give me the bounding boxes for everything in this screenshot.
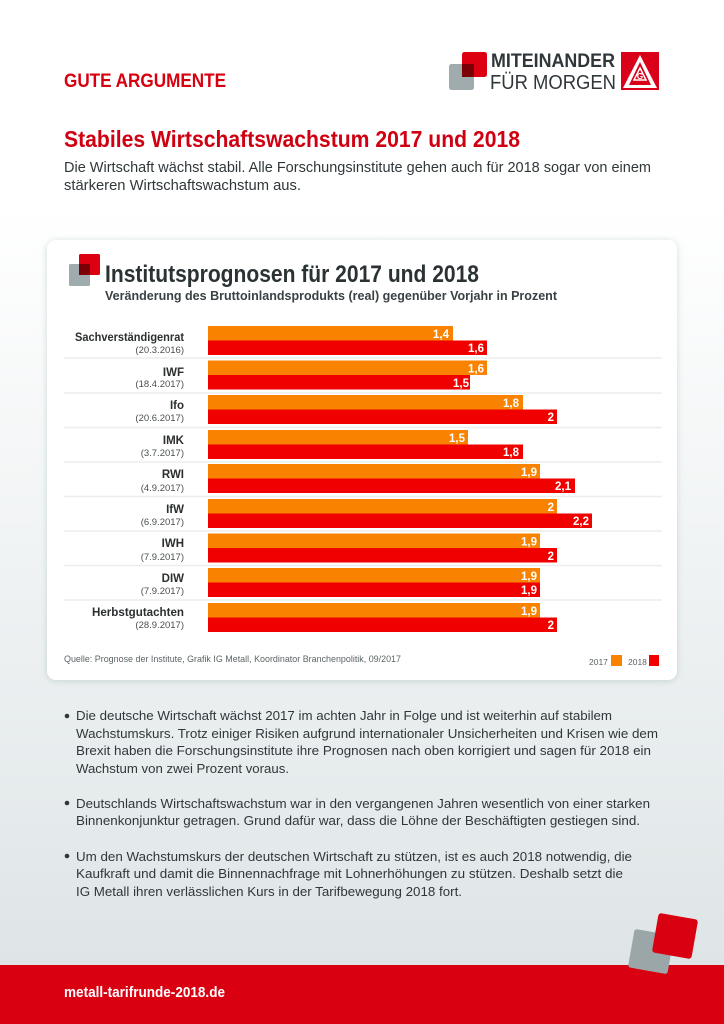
row: IWH: IWH — [162, 538, 184, 550]
panel: chart card — [47, 240, 677, 680]
row: IWF: 1,5 — [453, 378, 470, 390]
row: Sachverständigenrat: (20.3.2016) — [135, 345, 184, 356]
row: IMK: (3.7.2017) — [141, 448, 184, 459]
bullet 2: Deutschlands Wirtschaftswachstum war in den vergangenen Jahren wesentlich von einer starken — [76, 796, 650, 811]
row dividers — [64, 358, 662, 600]
row: RWI: 2,1 — [555, 481, 572, 493]
row: Sachverständigenrat — [75, 326, 487, 356]
logo: Miteinander für Morgen: MITEINANDER — [491, 51, 615, 72]
row: DIW: 1,9 — [521, 571, 537, 583]
row: IfW: 2,2 — [573, 516, 589, 528]
row: IfW: 2 — [548, 502, 554, 514]
row: IfW: IfW — [166, 504, 184, 516]
row: IfW — [141, 499, 592, 528]
row: Ifo: (20.6.2017) — [135, 413, 184, 424]
legend: 2017 — [589, 657, 608, 667]
bullet 3: IG Metall ihren verlässlichen Kurs in der Tarifbewegung 2018 fort. — [76, 884, 462, 899]
row: RWI: RWI — [162, 469, 184, 481]
intro text: Die Wirtschaft wächst stabil. Alle Forschungsinstitute gehen auch für 2018 sogar von einem — [64, 159, 651, 176]
row: RWI — [141, 464, 575, 494]
legend: 2018 — [628, 657, 647, 667]
row: Herbstgutachten: (28.9.2017) — [135, 620, 184, 631]
row: RWI: 1,9 — [521, 467, 537, 479]
bullet 3 — [65, 849, 632, 899]
row: IWH: 2 — [548, 551, 554, 563]
row: Sachverständigenrat: 1,4 — [433, 329, 450, 341]
row: IWF: IWF — [163, 367, 184, 379]
chart title: Institutsprognosen für 2017 und 2018 — [105, 261, 479, 288]
row: Sachverständigenrat: 1,6 — [468, 343, 484, 355]
icon: overlapping squares — [69, 254, 100, 286]
bullet 2 — [65, 796, 650, 828]
source note: Quelle: Prognose der Institute, Grafik IG Metall, Koordinator Branchenpolitik, 09/2017 — [64, 654, 401, 665]
row: RWI: (4.9.2017) — [141, 483, 184, 494]
row: Ifo: 2 — [548, 412, 554, 424]
logo: Miteinander für Morgen: G — [637, 72, 643, 81]
footer bar: metall-tarifrunde-2018.de — [64, 985, 225, 1001]
row: IfW: (6.9.2017) — [141, 517, 184, 528]
bullet 1: Wachstum von zwei Prozent voraus. — [76, 761, 289, 776]
row: DIW: 1,9 — [521, 585, 537, 597]
row: IMK: 1,5 — [449, 433, 466, 445]
bullet 1: Brexit haben die Forschungsinstitute ihre Prognosen nach oben korrigiert und sagen für 2018 ein — [76, 743, 651, 758]
section label: GUTE ARGUMENTE — [64, 71, 226, 92]
logo: Miteinander für Morgen — [449, 51, 659, 94]
bullet list — [65, 708, 658, 899]
row: Ifo: 1,8 — [503, 398, 520, 410]
row: IWH: (7.9.2017) — [141, 552, 184, 563]
intro text: stärkeren Wirtschaftswachstum aus. — [64, 177, 301, 194]
row: Sachverständigenrat: Sachverständigenrat — [75, 332, 184, 344]
bullet 3: Um den Wachstumskurs der deutschen Wirtschaft zu stützen, ist es auch 2018 notwendig, die — [76, 849, 632, 864]
row: IWH — [141, 534, 557, 563]
row: Ifo: Ifo — [170, 400, 184, 412]
row: Herbstgutachten: 1,9 — [521, 606, 537, 618]
row: DIW — [141, 568, 540, 597]
row: DIW: (7.9.2017) — [141, 586, 184, 597]
row: IWH: 1,9 — [521, 536, 537, 548]
intro text — [64, 159, 651, 194]
row: IWF: 1,6 — [468, 364, 484, 376]
chart subtitle: Veränderung des Bruttoinlandsprodukts (real) gegenüber Vorjahr in Prozent — [105, 289, 558, 303]
row: IMK: IMK — [163, 435, 185, 447]
row: Ifo — [135, 395, 557, 424]
row: Herbstgutachten: Herbstgutachten — [92, 607, 184, 619]
row: Herbstgutachten — [92, 603, 557, 632]
row: IMK — [141, 430, 523, 459]
row: IMK: 1,8 — [503, 447, 520, 459]
main title: Stabiles Wirtschaftswachstum 2017 und 2018 — [64, 126, 520, 152]
bullet 3: Kaufkraft und damit die Binnennachfrage mit Lohnerhöhungen zu stützen. Deshalb setzt die — [76, 866, 623, 881]
legend — [589, 655, 659, 667]
footer bar — [0, 965, 724, 1024]
row: IWF: (18.4.2017) — [135, 379, 184, 390]
bullet 1: Wachstumskurs. Trotz einiger Risiken aufgrund internationaler Unsicherheiten und Krisen wie dem — [76, 726, 658, 741]
row: Herbstgutachten: 2 — [548, 620, 554, 632]
bullet 2: Binnenkonjunktur getragen. Grund dafür war, dass die Löhne der Beschäftigten gestiegen sind. — [76, 813, 640, 828]
bar chart — [75, 326, 592, 632]
bullet 1: Die deutsche Wirtschaft wächst 2017 im achten Jahr in Folge und ist weiterhin auf stabilem — [76, 708, 612, 723]
row: DIW: DIW — [162, 573, 184, 585]
bullet 1 — [65, 708, 658, 776]
icon: tilted squares — [628, 913, 698, 974]
logo: Miteinander für Morgen: FÜR MORGEN — [490, 72, 616, 94]
row: IWF — [135, 360, 487, 390]
